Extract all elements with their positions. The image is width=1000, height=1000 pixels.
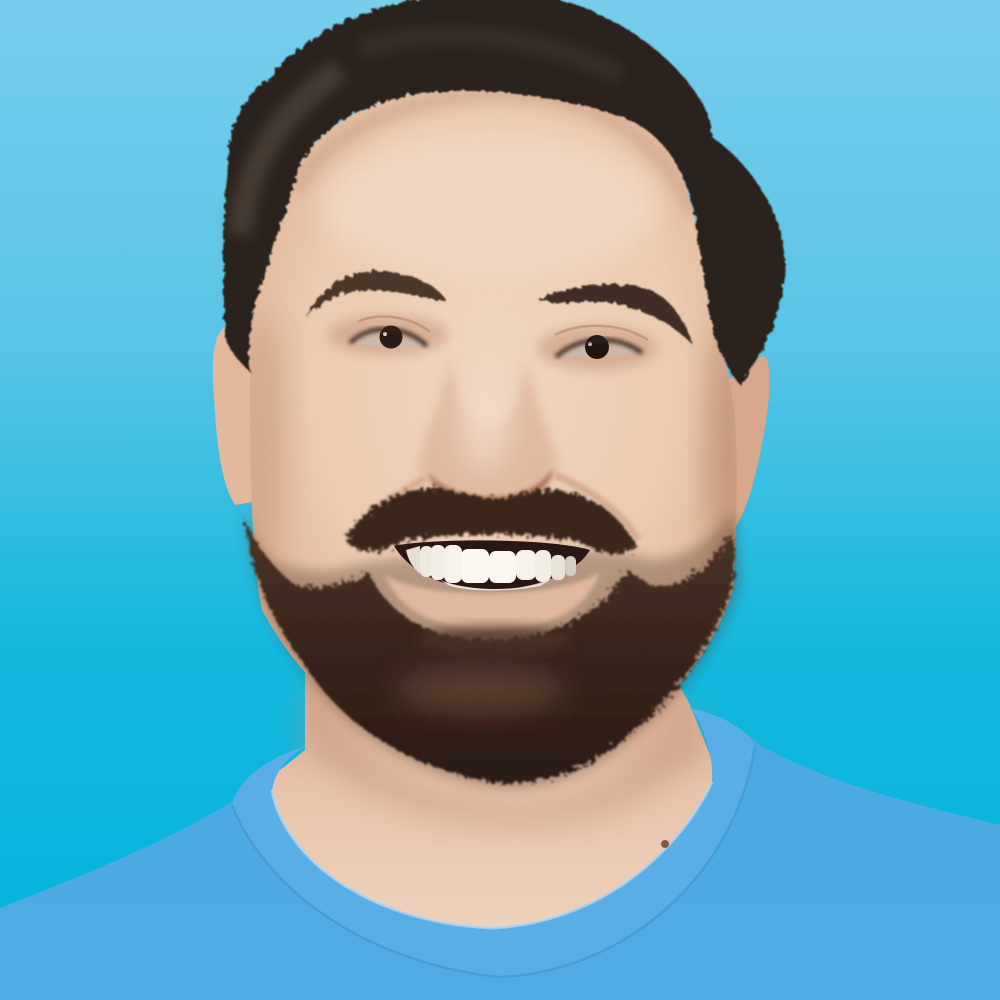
left ear: [213, 325, 262, 505]
right eyebrow: [538, 285, 692, 344]
collar seam: [232, 745, 755, 977]
lower lip skin: [385, 572, 600, 630]
forehead highlight: [320, 135, 660, 275]
right cheek shading: [694, 326, 737, 558]
left eye: [350, 317, 430, 348]
hair top sheen: [360, 35, 620, 75]
left eye socket shadow: [328, 315, 448, 355]
left laugh line: [350, 478, 425, 545]
teeth: [406, 545, 576, 590]
neck: [255, 650, 735, 950]
face shading: [238, 95, 750, 580]
beard: [245, 518, 735, 783]
mouth: [394, 540, 590, 590]
collar inner piping: [272, 782, 712, 928]
hair highlights: [240, 70, 340, 235]
hair: [223, 0, 786, 385]
t-shirt: [0, 708, 1000, 1000]
shirt collar: [232, 708, 755, 977]
right eye socket shadow: [537, 326, 657, 370]
moustache: [345, 488, 636, 554]
nose highlight: [459, 377, 511, 473]
right eye: [555, 326, 648, 359]
neck shadow: [304, 680, 705, 827]
face: [250, 82, 737, 770]
beard highlights: [395, 666, 565, 714]
beard stubble halo: [245, 505, 740, 788]
nostrils: [428, 468, 553, 504]
left eyebrow: [306, 271, 447, 316]
left cheek shading: [250, 316, 292, 555]
chin soul patch: [417, 626, 573, 654]
hairline shadow: [295, 95, 695, 215]
right ear: [712, 356, 770, 527]
nose shadow: [418, 355, 557, 503]
mole: [661, 840, 669, 848]
right laugh line: [555, 475, 638, 540]
